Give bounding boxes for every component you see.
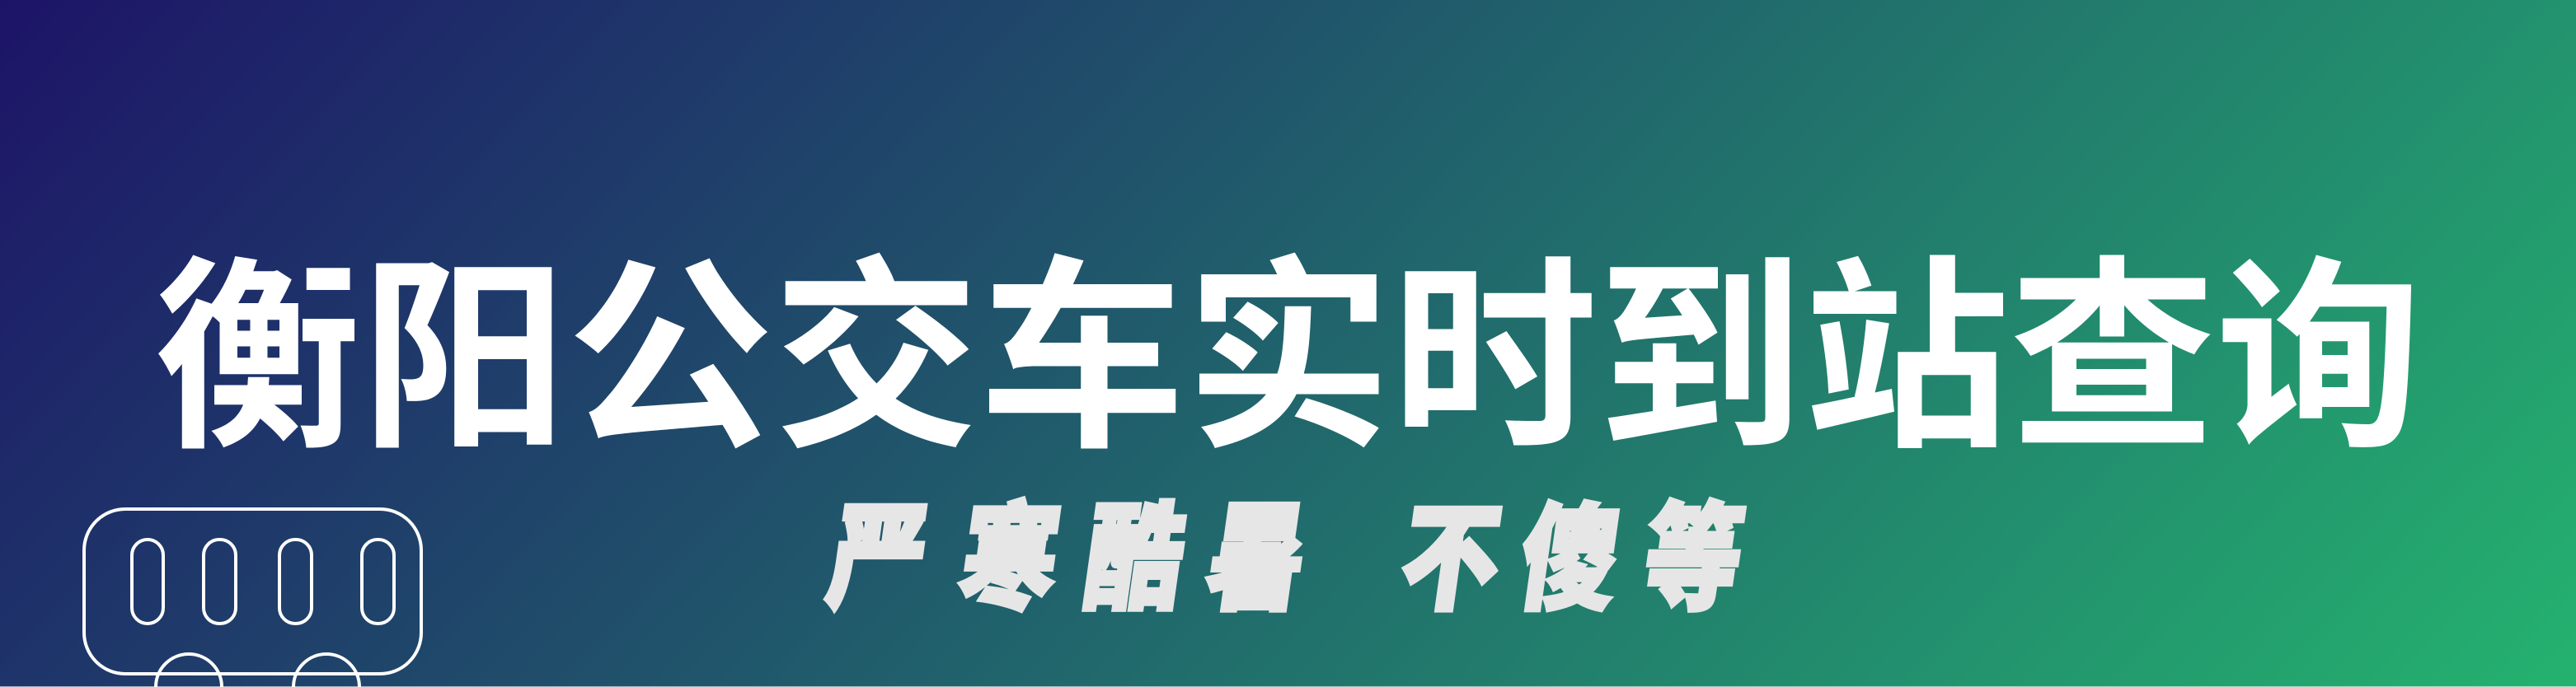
subtitle: 傻	[1512, 495, 1627, 625]
subtitle: 不	[1393, 495, 1509, 625]
title: 站	[1804, 244, 2010, 474]
title: 时	[1391, 244, 1598, 474]
title: 阳	[361, 244, 567, 474]
title: 到	[1598, 244, 1804, 474]
subtitle: 等	[1635, 495, 1751, 625]
subtitle	[820, 495, 1751, 625]
title: 询	[2216, 244, 2422, 474]
title: 车	[979, 244, 1185, 474]
subtitle: 寒	[952, 495, 1067, 625]
subtitle: 严	[820, 495, 936, 625]
icon: bus outline	[82, 507, 423, 687]
title: 查	[2010, 244, 2216, 474]
title: 衡	[155, 244, 361, 474]
title: 公	[567, 244, 773, 474]
title: 实	[1185, 244, 1391, 474]
title	[155, 244, 2422, 474]
title: 交	[773, 244, 979, 474]
subtitle: 暑	[1199, 495, 1315, 625]
subtitle: 酷	[1077, 495, 1192, 625]
